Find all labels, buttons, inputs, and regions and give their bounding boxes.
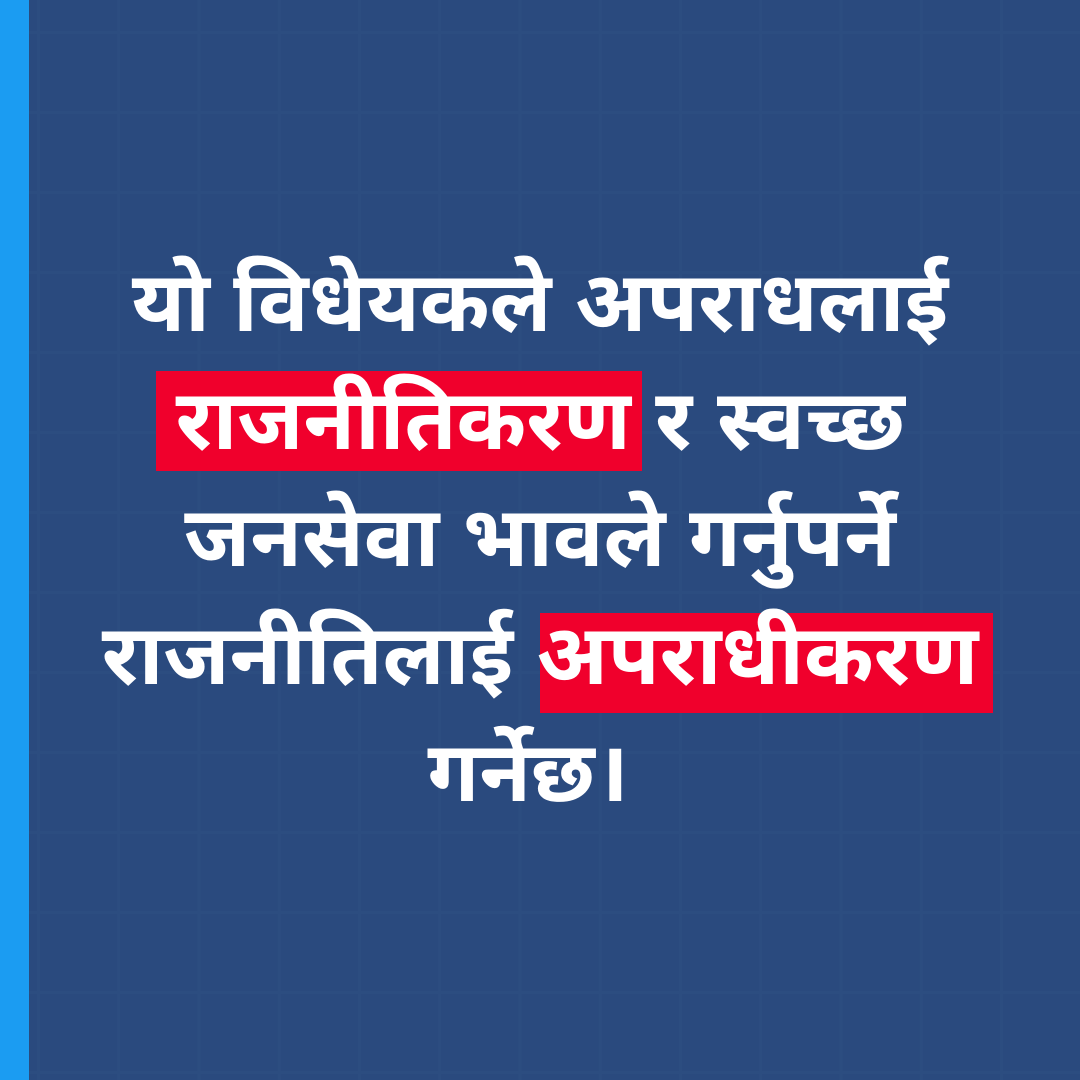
- line 5: गर्नेछ।: [427, 725, 628, 819]
- accent bar: [0, 0, 29, 1080]
- highlight: राजनीतिकरण: [156, 371, 642, 471]
- highlight: अपराधीकरण: [540, 613, 993, 713]
- line 2: राजनीतिकरण र: [176, 373, 692, 467]
- line 4: राजनीतिलाई अपराधीकरण: [102, 608, 978, 702]
- line 2: स्वच्छ: [717, 373, 904, 467]
- line 3: जनसेवा भावले गर्नुपर्ने: [184, 490, 896, 584]
- line 1: यो विधेयकले अपराधलाई: [132, 255, 948, 349]
